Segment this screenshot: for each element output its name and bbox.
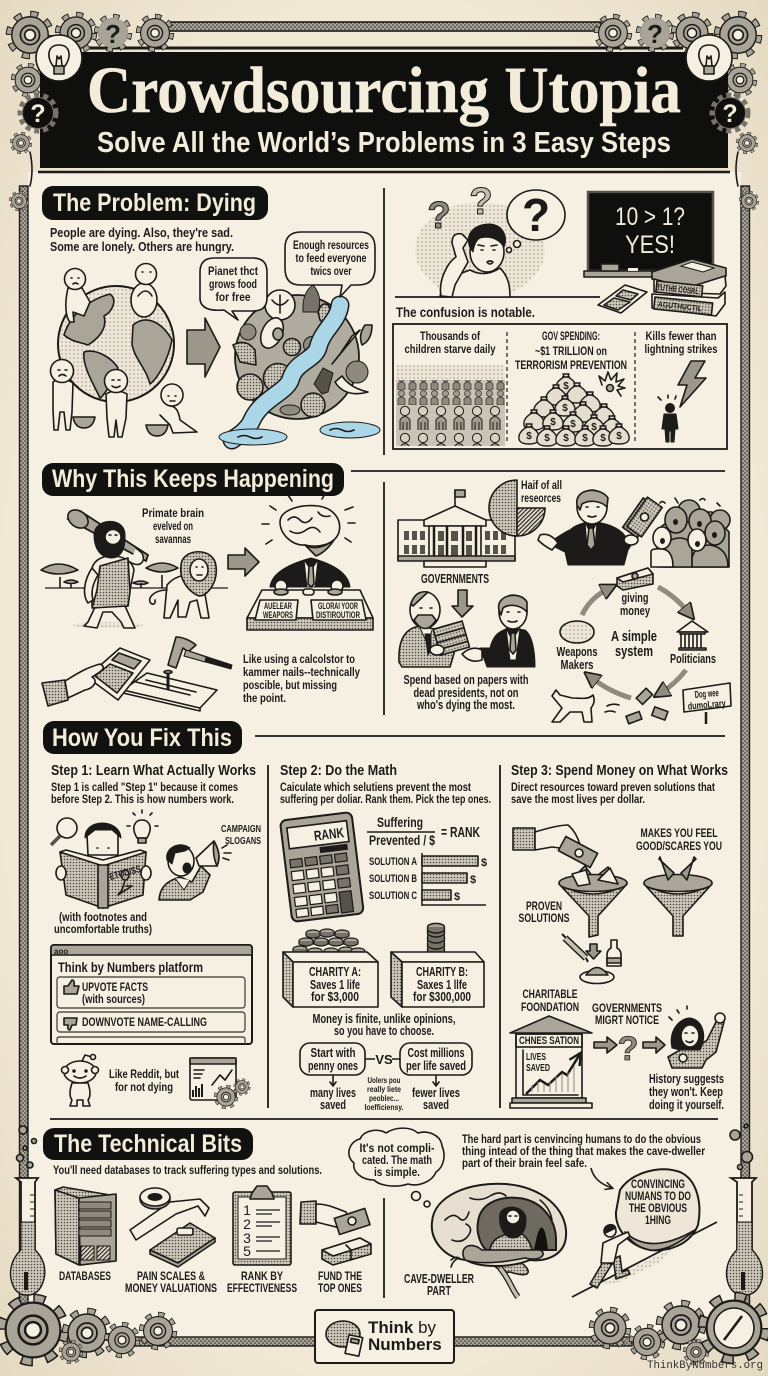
icon: left lightbulb medallion [36, 35, 82, 81]
outcome: many lives [310, 1086, 356, 1112]
step 2 heading: Step 2: Do the Math [280, 762, 397, 779]
illustration: foundation building with chart: LIVES [526, 1051, 546, 1063]
money bag pile: $ [550, 417, 556, 428]
browser window: platform [51, 945, 252, 1044]
icon: clipboard: 3 [243, 1230, 251, 1246]
arrow: to boulder [591, 1168, 612, 1188]
step 3 body: save the most lives per dollar. [511, 794, 645, 806]
formula: Suffering [377, 815, 423, 830]
money bag pile: $ [544, 433, 550, 444]
charity b: for $300,000 [413, 990, 471, 1004]
boulder: CONVINCING [631, 1177, 685, 1191]
heading: why: Why This Keeps Happening [52, 465, 334, 493]
text: the hard part: thing intead of the thing that makes the cave-dweller [462, 1144, 705, 1158]
text: calculator analogy: poscible, but missing [243, 678, 337, 692]
step 3 heading: Step 3: Spend Money on What Works [511, 762, 728, 779]
label: giving money: giving [622, 591, 648, 605]
question mark gray: ? [427, 195, 451, 237]
charity b: CHARITY B: [416, 965, 468, 979]
speech bubble: resources: to feed everyone [296, 253, 366, 265]
charity a [283, 929, 378, 1007]
label: rank by effectiveness [227, 1269, 297, 1295]
text: primate brain [142, 506, 204, 546]
illustration: man with megaphone [159, 841, 231, 900]
bar chart: solutions: $ [481, 857, 487, 869]
step 1 heading: Step 1: Learn What Actually Works [51, 762, 256, 779]
top left gears [10, 15, 171, 209]
icon: clipboard: 1 [243, 1202, 251, 1218]
caption: footnotes: uncomfortable truths) [54, 922, 152, 936]
illustration: sad people on globe [50, 264, 197, 437]
outcome: fewer lives: fewer lives [412, 1086, 460, 1100]
fact: starving children: Thousands of [420, 331, 480, 343]
url label: ThinkByNumbers.org [647, 1360, 763, 1372]
speech bubble: planet: Pianet thct [208, 266, 258, 278]
box: cost millions: Cost millions [408, 1046, 465, 1060]
bar chart: solutions: SOLUTION B [369, 873, 417, 885]
text: calculator analogy [243, 652, 360, 705]
arrow: governments down [452, 590, 473, 617]
funnel: fear [644, 857, 712, 936]
calculator [280, 812, 364, 922]
label: a simple system [611, 628, 657, 660]
thin person [50, 360, 74, 430]
calculator [598, 285, 647, 313]
label: makes you feel: MAKES YOU FEEL [640, 826, 718, 840]
browser window: platform: Think by Numbers platform [58, 959, 203, 975]
pie chart [489, 480, 545, 536]
calculator: RANK [313, 824, 345, 844]
thought cloud: not complicated: is simple. [374, 1165, 420, 1179]
money bag pile: $ [570, 419, 576, 430]
illustration: brain-headed leader at console: WEAPORS [263, 610, 293, 620]
icon: left flask [11, 1178, 45, 1295]
icons: syringe, bottle and food [562, 934, 621, 984]
step 1 body: before Step 2. This is how numbers work. [51, 794, 234, 806]
label: charitable foundation: CHARITABLE [522, 987, 578, 1001]
fine print: loefficiensy. [364, 1102, 404, 1112]
upvote row [57, 977, 245, 1008]
illustration: dog chasing money [552, 688, 668, 724]
sign: dog was democracy [683, 683, 731, 724]
standing person [104, 370, 128, 437]
label: a simple system: system [615, 643, 653, 660]
thought cloud: not complicated: It's not compli- [360, 1141, 434, 1155]
label: weapons makers: Weapons [556, 645, 598, 659]
text: like reddit: for not dying [115, 1080, 173, 1094]
formula: = RANK [441, 824, 480, 841]
illustration: lion [150, 552, 216, 618]
step 2 body: suffering per doliar. Rank them. Pick the tep ones. [280, 794, 491, 806]
money bag pile: $ [616, 431, 622, 442]
icon: clipboard: 2 [243, 1216, 251, 1232]
text: money is finite: Money is finite, unlike opinions, [312, 1012, 456, 1026]
label: governments might notice: MIGRT NOTICE [595, 1013, 659, 1027]
illustration: brain-headed leader at console [247, 494, 373, 630]
box: cost millions: per life saved [406, 1059, 466, 1073]
panel: how you fix this [43, 721, 728, 1112]
speech bubble: planet: grows food [209, 279, 257, 291]
sign: dog was democracy: dumoLrary [687, 698, 727, 713]
illustration: calculator hammering nail [42, 637, 232, 711]
money bag pile: $ [600, 433, 606, 444]
fine print: really liete [367, 1084, 401, 1094]
speech bubble: resources: twics over [310, 266, 352, 278]
text: money is finite: so you have to choose. [334, 1024, 434, 1038]
boulder: 1HING [645, 1213, 671, 1227]
illustration: caveman [64, 506, 148, 628]
illustration: boy reading book: ETODISS [108, 864, 142, 883]
illustration: savanna [41, 563, 228, 628]
money bag pile: $ [591, 422, 597, 433]
heading: the problem: The Problem: Dying [53, 189, 256, 217]
sign: dog was democracy: Dog wee [694, 688, 719, 701]
illustration: brain-headed leader at console: AUELEAR [264, 601, 292, 611]
text: primate brain: savannas [155, 532, 191, 546]
step 1 body [51, 782, 238, 806]
boulder [616, 1169, 699, 1250]
label: half of resources [521, 480, 562, 505]
label: cave-dweller part [404, 1257, 474, 1298]
arrow: to question [594, 1037, 617, 1053]
icon: clipboard: 5 [243, 1243, 251, 1259]
text: history suggests: they won't. Keep [649, 1085, 723, 1099]
label: campaign slogans [221, 823, 261, 847]
chalkboard [584, 192, 715, 277]
bar chart: solutions: SOLUTION A [369, 856, 417, 868]
icon: left question gear: ? [30, 100, 46, 128]
text: confusion: The confusion is notable. [396, 304, 535, 320]
illustration: foundation building with chart: CHNES SATION [519, 1035, 579, 1047]
label: proven solutions: PROVEN [526, 899, 562, 913]
fine print: Uolers pou [368, 1075, 400, 1085]
label: charitable foundation: FOONDATION [521, 1000, 579, 1014]
title banner [40, 52, 728, 168]
text: history suggests: History suggests [649, 1072, 724, 1086]
outcome: many lives: many lives [310, 1086, 356, 1100]
panel: the problem [42, 181, 727, 455]
books [652, 259, 726, 316]
heading: technical bits: The Technical Bits [54, 1130, 242, 1158]
browser window: platform: aoo [54, 947, 68, 956]
label: proven solutions: SOLUTIONS [518, 911, 570, 925]
bar chart: solutions: $ [470, 874, 476, 886]
icon: small brain [560, 621, 594, 643]
charity a: CHARITY A: [309, 965, 361, 979]
illustration: politician with cash [538, 490, 662, 565]
text: calculator analogy: kammer nails--technically [243, 665, 360, 679]
arrow: globe to food [187, 318, 220, 377]
text: primate brain: evelved on [153, 519, 193, 533]
money bag pile: $ [526, 431, 532, 442]
label: fund the top ones: TOP ONES [318, 1281, 362, 1295]
illustration: worried crowd [651, 498, 730, 567]
bar chart: solutions: $ [454, 891, 460, 903]
icon: cash stack [617, 568, 653, 590]
money bag pile: $ [563, 381, 569, 392]
label: campaign slogans: SLOGANS [225, 835, 261, 847]
text: spend based on papers: dead presidents, not on [414, 686, 518, 700]
step 2 body: Caiculate which selutiens prevent the most [280, 782, 471, 794]
icon: magnifier [51, 818, 77, 845]
label: half of resources: reseorces [521, 493, 561, 505]
text: spend based on papers: who's dying the most. [416, 698, 515, 712]
text: spend based on papers [404, 673, 528, 712]
icon: hand giving cash [300, 1201, 371, 1265]
books: AGUTHUCTIL [658, 300, 702, 313]
step 3 body [511, 782, 715, 806]
icon: reddit alien [62, 1054, 98, 1106]
label: cave-dweller part: PART [427, 1284, 451, 1298]
top right gears: ? [647, 19, 663, 49]
text: calculator analogy: the point. [243, 691, 286, 705]
illustration: government building [398, 490, 515, 567]
label: fund the top ones: FUND THE [318, 1269, 362, 1283]
coin stack [428, 923, 444, 961]
thought cloud: not complicated [349, 1128, 444, 1207]
logo: think by numbers: Think by [368, 1318, 437, 1337]
illustration: brain-headed leader at console: DISTIROUTIOR [316, 610, 360, 620]
thought cloud: not complicated: cated. The math [362, 1153, 432, 1167]
label: politicians: Politicians [670, 652, 716, 666]
fact: government spending: TERRORISM PREVENTION [515, 360, 627, 372]
icon: right bubbles [730, 1124, 752, 1170]
icon: lightbulb [127, 810, 158, 843]
downvote row [57, 1012, 245, 1032]
label: rank by effectiveness: RANK BY [241, 1269, 283, 1283]
person crying on globe right [131, 264, 157, 317]
text: money is finite [312, 1012, 456, 1038]
text: calculator analogy: Like using a calcolstor to [243, 652, 355, 666]
speech bubble: planet [200, 258, 267, 320]
label: pain scales [125, 1269, 217, 1295]
label: vs: VS [375, 1052, 393, 1067]
icon: lightning bolt [678, 361, 706, 407]
question mark light: ? [469, 181, 493, 223]
gears: bottom left [3, 1300, 174, 1362]
label: giving money [620, 591, 650, 618]
downvote row: DOWNVOTE NAME-CALLING [82, 1017, 207, 1029]
inner paper panel [28, 172, 741, 1337]
label: governments: GOVERNMENTS [421, 572, 489, 586]
caption: footnotes [54, 910, 152, 936]
panel: three facts [393, 324, 727, 449]
thought bubble [506, 189, 565, 252]
text: history suggests [649, 1072, 724, 1112]
text: people are dying: Some are lonely. Others are hungry. [50, 239, 234, 254]
gears: bottom right [592, 1298, 764, 1363]
arrows: cycle [582, 587, 688, 698]
diagram: simple system cycle [552, 568, 731, 724]
chalkboard: 10 > 1? [615, 203, 685, 231]
bowl right [146, 425, 168, 436]
upvote row: UPVOTE FACTS [82, 982, 148, 994]
outcome: fewer lives: saved [423, 1098, 449, 1112]
arrow: to woman [643, 1037, 665, 1053]
label: pain scales: MONEY VALUATIONS [125, 1281, 217, 1295]
outcome: fewer lives [412, 1086, 460, 1112]
illustration: boy reading book [56, 823, 151, 908]
thought bubble: ? [522, 189, 550, 241]
label: databases: DATABASES [59, 1269, 111, 1283]
label: weapons makers [556, 645, 598, 672]
illustration: brain with caveman [432, 1184, 566, 1297]
comparison: penny vs millions [300, 1043, 472, 1112]
fact: starving children: children starve daily [404, 344, 496, 356]
icon: right question gear [712, 95, 748, 131]
fact: government spending: ~$1 TRILLION on [535, 346, 607, 358]
icon: right question gear: ? [722, 100, 738, 128]
label: campaign slogans: CAMPAIGN [221, 823, 261, 835]
charity a: Saves 1 life [310, 978, 360, 992]
label: governments might notice [592, 1001, 662, 1027]
speech bubble: resources [285, 232, 375, 297]
box: penny ones: penny ones [308, 1059, 358, 1073]
icon: right lightbulb medallion [686, 35, 732, 81]
label: pain scales: PAIN SCALES & [137, 1269, 205, 1283]
illustration: politician shaking [462, 595, 535, 667]
icon: tape measure and scale [130, 1188, 215, 1267]
coin pile [293, 929, 365, 956]
label: cave-dweller part: CAVE-DWELLER [404, 1272, 474, 1286]
logo brain [326, 1321, 363, 1356]
label: half of resources: Haif of all [521, 480, 562, 492]
speech bubble: resources: Enough resources [293, 240, 369, 252]
charity a: for $3,000 [311, 990, 359, 1004]
text: like reddit: Like Reddit, but [109, 1067, 179, 1081]
text: people are dying [50, 225, 234, 254]
fact: starving children [396, 331, 505, 446]
icon: left question gear [20, 95, 56, 131]
fine print: peoblec... [369, 1093, 399, 1103]
label: makes you feel: GOOD/SCARES YOU [636, 839, 722, 853]
upvote row: (with sources) [82, 994, 145, 1006]
text: people are dying: People are dying. Also, they're sad. [50, 225, 233, 240]
man pushing [590, 1224, 630, 1288]
fact: lightning [644, 331, 718, 442]
top right gears [597, 15, 758, 209]
icon: person [658, 395, 678, 442]
label: rank by effectiveness: EFFECTIVENESS [227, 1281, 297, 1295]
caption: footnotes: (with footnotes and [59, 910, 147, 924]
text: like reddit [109, 1067, 179, 1094]
label: charitable foundation [521, 987, 579, 1014]
boulder: THE OBVIOUS [629, 1201, 687, 1215]
money bag pile [519, 372, 629, 446]
heading: how you fix this: How You Fix This [52, 724, 232, 752]
charity b [391, 923, 484, 1007]
icon: question mark: ? [618, 1030, 638, 1068]
logo: think by numbers [315, 1310, 454, 1363]
subtitle: Solve All the World’s Problems in 3 Easy Steps [97, 127, 671, 159]
fact: government spending: GOV SPENDING: [542, 331, 600, 343]
illustration: foundation building with chart: SAVED [526, 1062, 550, 1074]
label: governments might notice: GOVERNMENTS [592, 1001, 662, 1015]
text: need databases: You'll need databases to track suffering types and solutions. [53, 1163, 322, 1177]
bar chart: solutions [369, 853, 487, 906]
fact: lightning: Kills fewer than [646, 331, 716, 343]
person sitting on globe left [64, 268, 90, 322]
box: penny ones [300, 1043, 365, 1075]
text: the hard part: The hard part is cenvincing humans to do the obvious [462, 1132, 701, 1146]
icon: left bubbles [16, 1126, 36, 1168]
label: giving money: money [620, 604, 650, 618]
fine print [364, 1075, 404, 1112]
boulder: NUMANS TO DO [625, 1189, 691, 1203]
bowl left [73, 417, 95, 428]
illustration: slope and man pushing boulder [572, 1169, 717, 1297]
formula [367, 815, 480, 848]
title: Crowdsourcing Utopia [87, 54, 681, 127]
icon: server tower [55, 1187, 116, 1265]
formula: Prevented / $ [369, 833, 435, 848]
text: spend based on papers: Spend based on papers with [404, 673, 528, 687]
outcome: many lives: saved [320, 1098, 346, 1112]
label: a simple system: A simple [611, 628, 657, 645]
arrow: caveman to leader [228, 548, 259, 576]
column: step 1 [51, 762, 261, 1107]
icon: right flask [727, 1178, 762, 1295]
illustration: old banker [399, 592, 470, 667]
illustration: cheering woman [668, 1006, 725, 1068]
speech bubble: planet: for free [216, 292, 250, 304]
books: TUTHB COSRL [657, 283, 699, 296]
fact: lightning: lightning strikes [644, 344, 718, 356]
money bag pile: $ [582, 433, 588, 444]
step 2 body [280, 782, 491, 806]
text: the hard part [462, 1132, 705, 1170]
fact: government spending [515, 331, 629, 446]
bar chart: solutions: SOLUTION C [369, 890, 417, 902]
illustration: hand dropping cash in funnel [513, 825, 627, 937]
money bag pile: $ [562, 403, 568, 414]
icon: clipboard [233, 1186, 291, 1265]
top left gears: ? [105, 19, 121, 49]
panel: why this keeps happening [41, 463, 731, 724]
text: the hard part: part of their brain feel safe. [462, 1156, 587, 1170]
step 3 body: Direct resources toward preven solutions that [511, 782, 715, 794]
column: step 2 [280, 762, 491, 1112]
logo: think by numbers: Numbers [368, 1335, 442, 1354]
illustration: food planet with waterfall [219, 285, 380, 445]
text: primate brain: Primate brain [142, 506, 204, 520]
column: step 3 [510, 762, 728, 1112]
panel: the technical bits [3, 1124, 764, 1372]
illustration: brain-headed leader at console: GLORAI YOOR [318, 601, 358, 611]
kneeling person [160, 384, 197, 433]
label: proven solutions [518, 899, 570, 925]
illustration: foundation building with chart [510, 1016, 592, 1108]
icon: dashboard with gears [190, 1058, 249, 1107]
label: fund the top ones [318, 1269, 362, 1295]
charity b: Saxes 1 llfe [417, 978, 467, 992]
box: cost millions [400, 1043, 472, 1075]
label: makes you feel [636, 826, 722, 853]
step 1 body: Step 1 is called "Step 1" because it comes [51, 782, 238, 794]
label: weapons makers: Makers [560, 658, 594, 672]
chalkboard: YES! [625, 231, 675, 259]
box: penny ones: Start with [310, 1046, 356, 1060]
icon: capitol [677, 621, 708, 650]
illustration: confused boy [395, 181, 600, 298]
money bag pile: $ [563, 433, 569, 444]
text: history suggests: doing it yourself. [649, 1098, 724, 1112]
